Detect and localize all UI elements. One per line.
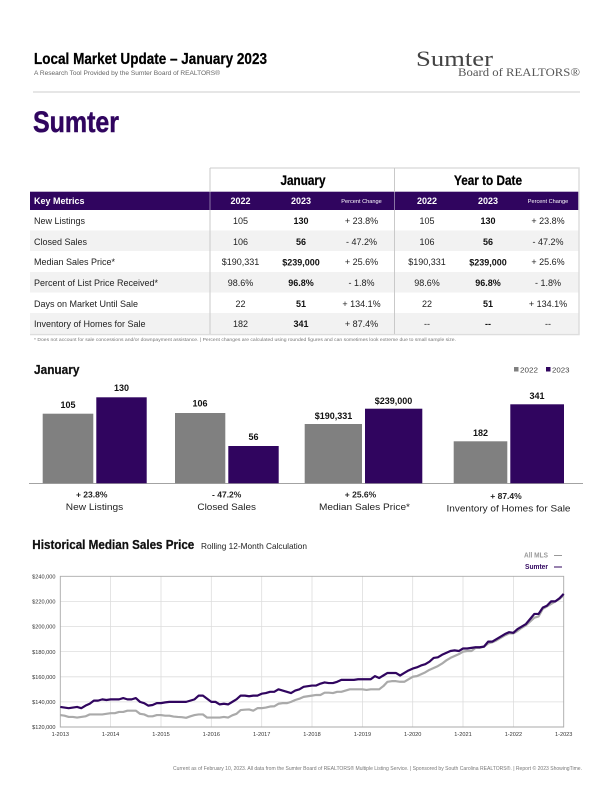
row: Closed Sales: 106 xyxy=(419,237,435,247)
row: Closed Sales: - 47.2% xyxy=(346,237,377,247)
bars: Closed Sales xyxy=(175,399,279,513)
row: Days on Market Until Sale: + 134.1% xyxy=(342,299,381,309)
legend xyxy=(514,366,570,374)
y axis labels: $220,000 xyxy=(32,600,56,606)
bars: Median Sales Price: $190,331 xyxy=(315,411,352,421)
x axis labels: 1-2019 xyxy=(354,732,371,738)
row: Closed Sales: Closed Sales xyxy=(34,237,88,247)
x axis labels: 1-2021 xyxy=(454,732,472,738)
row: Percent of List Price Received: 98.6% xyxy=(228,278,253,288)
bars: New Listings xyxy=(43,383,147,513)
bars: Closed Sales: Closed Sales xyxy=(197,502,256,513)
table header row: 2022 xyxy=(417,196,437,206)
row: Inventory of Homes for Sale: -- xyxy=(545,319,551,329)
y axis labels: $160,000 xyxy=(32,675,56,681)
row: Days on Market Until Sale: + 134.1% xyxy=(529,299,567,309)
heading: Year to Date: Year to Date xyxy=(454,173,522,188)
x axis labels: 1-2018 xyxy=(303,732,321,738)
x axis labels: 1-2017 xyxy=(253,732,270,738)
plot grid xyxy=(60,576,564,727)
bars: Inventory of Homes for Sale: 341 xyxy=(529,391,545,401)
row: New Listings: 105 xyxy=(419,216,435,226)
row: New Listings: + 23.8% xyxy=(345,216,378,226)
row: Closed Sales: 56 xyxy=(296,237,306,247)
row: Days on Market Until Sale: Days on Market Until Sale xyxy=(34,299,138,309)
x axis labels: 1-2013 xyxy=(52,732,69,738)
x axis labels: 1-2022 xyxy=(505,732,522,738)
heading: January: January xyxy=(34,362,80,377)
footer: Current as of February 10, 2023. All data from the Sumter Board of REALTORS® Multiple Listing Service. | Sponsored by South Carolina REALTORS®. | Report © 2023 ShowingTime. xyxy=(173,765,582,772)
bars: Closed Sales: - 47.2% xyxy=(212,490,242,500)
table header row: 2023 xyxy=(478,196,498,206)
bars: Inventory of Homes for Sale: + 87.4% xyxy=(490,491,522,501)
header xyxy=(34,46,580,79)
logo: Sumter Board of REALTORS: Board of REALTORS® xyxy=(458,65,580,79)
row: Percent of List Price Received: 96.8% xyxy=(475,278,501,288)
row: Percent of List Price Received xyxy=(34,278,561,288)
legend xyxy=(524,552,562,571)
panel: January bar chart xyxy=(29,362,583,514)
row: Median Sales Price: Median Sales Price* xyxy=(34,257,116,267)
row: Median Sales Price: $239,000 xyxy=(469,258,507,268)
row: Inventory of Homes for Sale: 182 xyxy=(233,319,248,329)
row: Closed Sales xyxy=(34,237,564,247)
bars: Inventory of Homes for Sale xyxy=(446,391,570,514)
title: Local Market Update – January 2023 xyxy=(34,51,267,68)
x axis labels: 1-2023 xyxy=(555,732,572,738)
table header row xyxy=(34,196,568,206)
line: All MLS xyxy=(60,595,564,718)
row: Days on Market Until Sale xyxy=(34,299,567,309)
row: Closed Sales: 56 xyxy=(483,237,493,247)
bars: New Listings: New Listings xyxy=(66,502,124,513)
row: Inventory of Homes for Sale: 341 xyxy=(293,319,309,329)
logo: Sumter Board of REALTORS: Sumter xyxy=(416,46,494,71)
x axis labels xyxy=(52,732,572,738)
y axis labels: $240,000 xyxy=(32,574,56,580)
bars: New Listings: 130 xyxy=(114,383,129,393)
row: Inventory of Homes for Sale: + 87.4% xyxy=(345,319,378,329)
y axis labels: $180,000 xyxy=(32,650,56,656)
logo: Sumter Board of REALTORS xyxy=(416,46,580,79)
table header row: 2022 xyxy=(230,196,251,206)
bars: Inventory of Homes for Sale: Inventory of Homes for Sale xyxy=(446,504,570,514)
x axis labels: 1-2014 xyxy=(102,732,119,738)
table header row: Percent Change xyxy=(341,199,382,205)
y axis labels: $140,000 xyxy=(32,700,56,706)
legend: 2022 xyxy=(520,366,538,374)
row: Percent of List Price Received: - 1.8% xyxy=(535,278,561,288)
row: Median Sales Price: $239,000 xyxy=(282,258,320,268)
table footnote: * Does not account for sale concessions and/or downpayment assistance. | Percent changes are calculated using rounded figures and can sometimes look extreme due to small sample size. xyxy=(34,337,456,343)
legend: 2023 xyxy=(552,366,570,374)
row: Median Sales Price xyxy=(34,257,565,268)
bars: Median Sales Price xyxy=(305,396,422,513)
bars: New Listings: + 23.8% xyxy=(76,490,108,500)
row: New Listings: 105 xyxy=(233,216,248,226)
subheading: Rolling 12-Month Calculation xyxy=(201,541,307,551)
bars: Median Sales Price: $239,000 xyxy=(375,396,412,406)
x axis labels: 1-2016 xyxy=(203,732,220,738)
table header row: Percent Change xyxy=(528,199,568,205)
bars: Median Sales Price: Median Sales Price* xyxy=(319,502,410,513)
row: New Listings: 130 xyxy=(293,216,309,226)
row: Median Sales Price: + 25.6% xyxy=(345,257,378,267)
subtitle: A Research Tool Provided by the Sumter Board of REALTORS® xyxy=(34,69,220,77)
heading: Historical Median Sales Price xyxy=(32,537,194,552)
row: Days on Market Until Sale: 51 xyxy=(296,299,306,309)
row: Closed Sales: - 47.2% xyxy=(532,237,564,247)
row: Percent of List Price Received: 96.8% xyxy=(288,278,314,288)
bars: Median Sales Price: + 25.6% xyxy=(345,490,377,500)
line: Sumter xyxy=(60,594,564,708)
bars: Inventory of Homes for Sale: 182 xyxy=(473,428,488,438)
row: Median Sales Price: $190,331 xyxy=(408,257,446,267)
row: Percent of List Price Received: 98.6% xyxy=(414,278,440,288)
row: Days on Market Until Sale: 22 xyxy=(235,299,246,309)
row: Median Sales Price: $190,331 xyxy=(222,257,259,267)
row: Closed Sales: 106 xyxy=(233,237,248,247)
row: New Listings: 130 xyxy=(480,216,496,226)
bars: New Listings: 105 xyxy=(60,400,76,410)
row: Inventory of Homes for Sale: -- xyxy=(485,319,491,329)
area name heading: Sumter xyxy=(33,106,119,139)
row: Days on Market Until Sale: 22 xyxy=(422,299,432,309)
table header row: Key Metrics xyxy=(34,196,85,206)
bars: Closed Sales: 56 xyxy=(248,432,259,442)
row: New Listings: New Listings xyxy=(34,216,86,226)
x axis labels: 1-2015 xyxy=(152,732,170,738)
row: Inventory of Homes for Sale: Inventory of Homes for Sale xyxy=(34,319,146,329)
heading: January: January xyxy=(280,173,326,188)
row: Inventory of Homes for Sale: -- xyxy=(424,319,430,329)
y axis labels: $120,000 xyxy=(32,725,56,731)
row: Median Sales Price: + 25.6% xyxy=(531,257,565,267)
row: Days on Market Until Sale: 51 xyxy=(483,299,493,309)
y axis labels xyxy=(32,574,56,731)
row: New Listings xyxy=(34,216,565,226)
panel: key metrics table xyxy=(30,168,579,334)
legend: All MLS xyxy=(524,552,548,560)
bars: Closed Sales: 106 xyxy=(192,399,208,409)
legend: Sumter xyxy=(525,564,548,571)
x axis labels: 1-2020 xyxy=(404,732,421,738)
row: New Listings: + 23.8% xyxy=(531,216,565,226)
y axis labels: $200,000 xyxy=(32,624,56,630)
row: Percent of List Price Received: Percent of List Price Received* xyxy=(34,278,159,288)
row: Percent of List Price Received: - 1.8% xyxy=(348,278,375,288)
table header row: 2023 xyxy=(291,196,311,206)
panel: historical median sales price chart xyxy=(32,537,572,738)
row: Inventory of Homes for Sale xyxy=(34,319,551,329)
